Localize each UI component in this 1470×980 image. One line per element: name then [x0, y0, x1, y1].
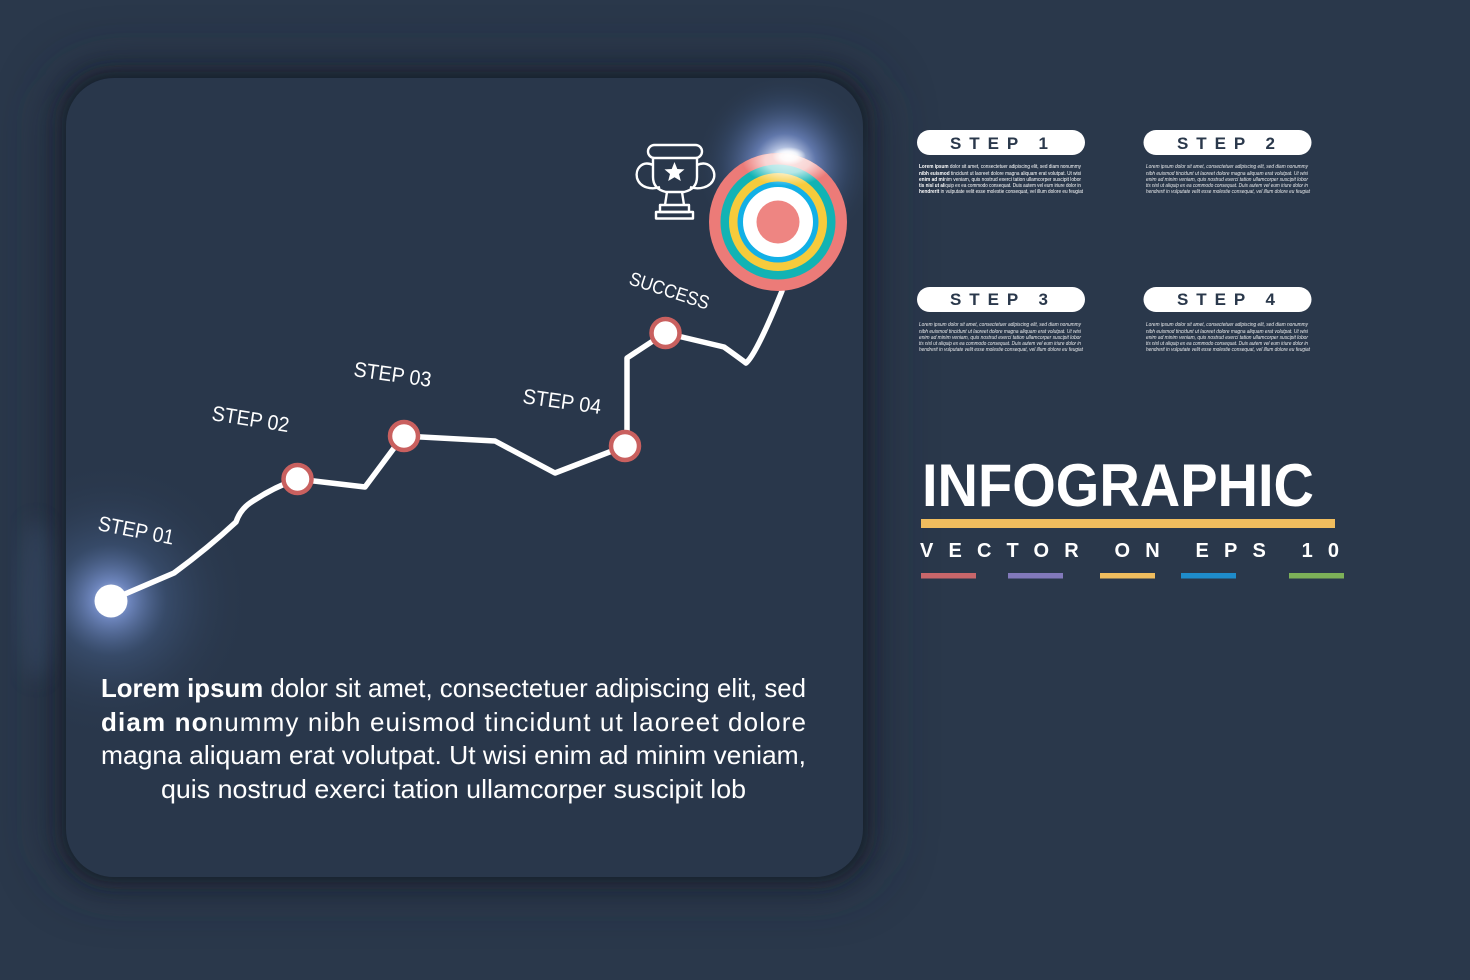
glow: start point: [66, 508, 203, 692]
step card 4: hendrerit in vulputate velit esse molestie consequat, vel illum dolore eu feugiat: [1146, 347, 1310, 353]
target: concentric circles: [709, 153, 847, 291]
step card 3: enim ad minim veniam, quis nostrud exerci tation ullamcorper suscipit lobor: [919, 335, 1082, 341]
step card 1: tis nisl ut aliquip ex ea commodo consequat. Duis autem vel eum iriure dolor in: [919, 183, 1081, 189]
step card 4: [1144, 287, 1312, 353]
step card 1: [917, 130, 1085, 195]
label: step 03: STEP 03: [352, 358, 433, 392]
node: step 03: [390, 422, 418, 450]
step card 1: STEP 1: [950, 134, 1048, 153]
flare: on target: [744, 148, 826, 186]
step card 2: STEP 2: [1177, 134, 1275, 153]
step card 2: hendrerit in vulputate velit esse molestie consequat, vel illum dolore eu feugiat: [1146, 189, 1310, 195]
panel: main card: [46, 62, 884, 892]
step card 1: hendrerit in vulputate velit esse molestie consequat, vel illum dolore eu feugiat: [919, 189, 1083, 195]
step card 2: nibh euismod tincidunt ut laoreet dolore magna aliquam erat volutpat. Ut wisi: [1146, 171, 1309, 177]
icon: trophy: [637, 145, 714, 218]
yellow underline: [921, 519, 1335, 528]
step card 3: STEP 3: [950, 290, 1048, 309]
text block: main paragraph: Lorem ipsum dolor sit amet, consectetuer adipiscing elit, sed: [101, 673, 806, 703]
step card 4: STEP 4: [1177, 290, 1276, 309]
heading: infographic: INFOGRAPHIC: [922, 452, 1314, 519]
step card 3: Lorem ipsum dolor sit amet, consectetuer adipiscing elit, sed diam nonummy: [919, 322, 1082, 328]
step card 3: tis nisl ut aliquip ex ea commodo consequat. Duis autem vel eum iriure dolor in: [919, 341, 1081, 347]
start point: [94, 584, 128, 618]
path line: growth route: [111, 291, 782, 600]
step card 2: [1144, 130, 1312, 195]
label: step 02: STEP 02: [210, 402, 291, 437]
text block: main paragraph: diam nonummy nibh euismod tincidunt ut laoreet dolore: [101, 707, 806, 737]
glow: target top: [695, 75, 875, 255]
step card 3: [917, 287, 1085, 353]
text block: main paragraph: quis nostrud exerci tation ullamcorper suscipit lob: [161, 774, 746, 804]
node: step 04: [611, 432, 639, 460]
node: step 02: [284, 465, 312, 493]
step card 2: enim ad minim veniam, quis nostrud exerci tation ullamcorper suscipit lobor: [1146, 177, 1309, 183]
subheading: vector on eps 10: VECTOR ON EPS 10: [920, 540, 1339, 562]
step card 4: Lorem ipsum dolor sit amet, consectetuer adipiscing elit, sed diam nonummy: [1146, 322, 1309, 328]
step card 1: Lorem ipsum dolor sit amet, consectetuer adipiscing elit, sed diam nonummy: [919, 164, 1081, 170]
label: step 01: STEP 01: [96, 512, 176, 550]
step card 3: nibh euismod tincidunt ut laoreet dolore magna aliquam erat volutpat. Ut wisi: [919, 329, 1082, 335]
step card 1: enim ad minim veniam, quis nostrud exerci tation ullamcorper suscipit lobor: [919, 177, 1081, 183]
step card 4: enim ad minim veniam, quis nostrud exerci tation ullamcorper suscipit lobor: [1146, 335, 1309, 341]
step card 4: nibh euismod tincidunt ut laoreet dolore magna aliquam erat volutpat. Ut wisi: [1146, 329, 1309, 335]
label: success: SUCCESS: [626, 269, 712, 314]
step card 2: Lorem ipsum dolor sit amet, consectetuer adipiscing elit, sed diam nonummy: [1146, 164, 1309, 170]
step card 3: hendrerit in vulputate velit esse molestie consequat, vel illum dolore eu feugiat: [919, 347, 1083, 353]
colour bars: [921, 573, 1344, 578]
glow: left outside panel: [18, 520, 54, 680]
label: step 04: STEP 04: [521, 385, 603, 419]
text block: main paragraph: [101, 673, 806, 804]
text block: main paragraph: magna aliquam erat volutpat. Ut wisi enim ad minim veniam,: [101, 740, 806, 770]
step card 1: nibh euismod tincidunt ut laoreet dolore magna aliquam erat volutpat. Ut wisi: [919, 171, 1081, 177]
step card 4: tis nisl ut aliquip ex ea commodo consequat. Duis autem vel eum iriure dolor in: [1146, 341, 1308, 347]
node: success: [652, 319, 680, 347]
step card 2: tis nisl ut aliquip ex ea commodo consequat. Duis autem vel eum iriure dolor in: [1146, 183, 1308, 189]
